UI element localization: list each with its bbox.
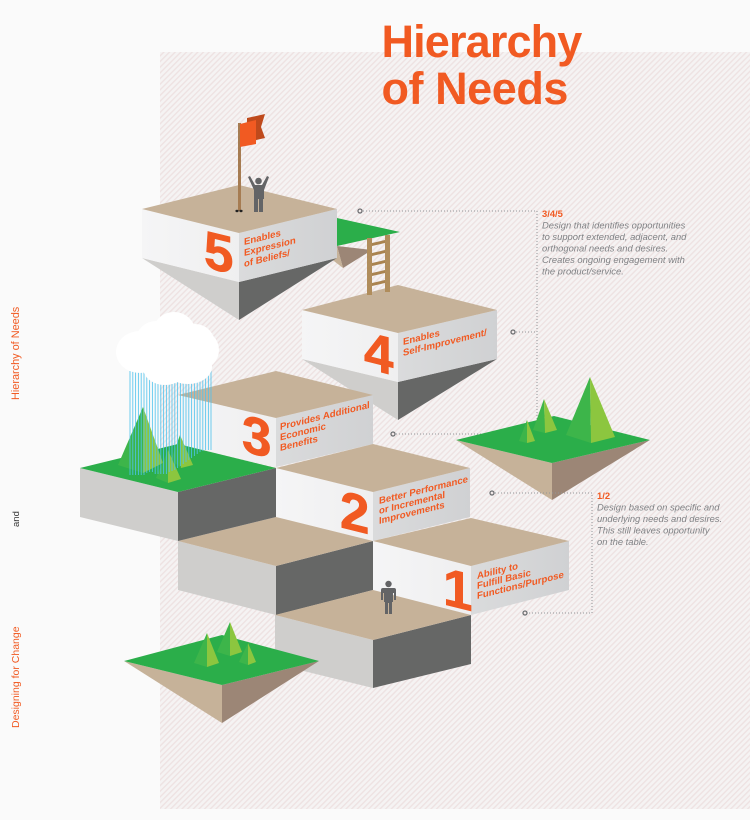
label: Ability to Fulfill Basic Functions/Purpose: Ability to <box>477 561 518 582</box>
label: Better Performance or Incremental Improvements: or Incremental <box>379 490 445 517</box>
text block: 1/2 <box>597 490 722 547</box>
icon: cloud <box>116 312 219 385</box>
title: of Needs <box>382 63 568 114</box>
number 3: 3 <box>242 404 271 470</box>
label: Provides Additional Economic Benefits: Economic <box>280 421 326 443</box>
block 4 <box>302 285 497 420</box>
label: Enables Expression of Beliefs: Enables <box>244 228 281 248</box>
number 5: 5 <box>204 220 233 286</box>
bottom floating island <box>124 622 319 723</box>
label: Better Performance or Incremental Improvements: Better Performance <box>379 474 469 507</box>
number 4: 4 <box>364 321 394 387</box>
green block with trees <box>80 407 276 541</box>
icon: flag <box>235 114 265 212</box>
block 1 <box>373 518 569 623</box>
tree back <box>171 435 193 468</box>
side label: and: and <box>11 511 22 527</box>
text block: 1/2: 1/2 <box>597 490 610 501</box>
tree 1 <box>194 633 219 667</box>
label: Ability to Fulfill Basic Functions/Purpose: Fulfill Basic <box>477 568 531 592</box>
text block: 1/2: Design based on specific and <box>597 502 720 512</box>
small island behind block 5 <box>330 218 400 268</box>
text block: 1/2: This still leaves opportunity <box>597 524 711 536</box>
label: Enables Expression of Beliefs <box>244 224 296 270</box>
label: Ability to Fulfill Basic Functions/Purpose: Functions/Purpose <box>477 570 564 602</box>
block 2 <box>276 444 470 546</box>
text block: 1/2: on the table. <box>597 536 649 547</box>
side label: Hierarchy of Needs: Hierarchy of Needs <box>10 306 22 400</box>
text block: 3/4/5 <box>542 208 687 276</box>
label: Provides Additional Economic Benefits: Benefits <box>280 434 318 454</box>
icon: ladder <box>367 235 390 295</box>
tree big <box>566 377 615 443</box>
right floating island <box>456 377 650 500</box>
callout lines: 1/2 <box>490 491 592 615</box>
title <box>382 16 582 114</box>
label: Ability to Fulfill Basic Functions/Purpose <box>477 550 564 602</box>
label: Enables Expression of Beliefs: Expression <box>244 235 296 259</box>
text block: 1/2: underlying needs and desires. <box>597 513 722 524</box>
number 1: 1 <box>443 557 472 623</box>
label: Better Performance or Incremental Improvements <box>379 474 469 527</box>
side label: Designing for Change: Designing for Change <box>10 626 22 728</box>
step: lowest plain block <box>275 590 471 688</box>
title: Hierarchy <box>382 16 582 67</box>
label: Enables Self-Improvement: Self-Improvement/ <box>403 327 487 359</box>
label: Provides Additional Economic Benefits: Provides Additional <box>280 400 370 433</box>
tree small <box>519 420 535 443</box>
label: Enables Self-Improvement: Enables <box>403 328 440 348</box>
text block: 3/4/5: Design that identifies opportunities <box>542 220 686 230</box>
tree 2 <box>217 622 242 656</box>
tree front <box>156 450 181 483</box>
step: middle plain block <box>178 517 373 615</box>
label: Better Performance or Incremental Improvements: Improvements <box>379 500 445 527</box>
text block: 3/4/5: to support extended, adjacent, and <box>542 231 687 242</box>
label: Enables Expression of Beliefs: of Beliefs/ <box>244 248 290 270</box>
callout lines: 3/4/5 <box>358 209 537 436</box>
text block: 3/4/5: the product/service. <box>542 266 624 276</box>
text block: 3/4/5: orthogonal needs and desires. <box>542 242 668 254</box>
tree medium <box>533 399 557 433</box>
block 5 <box>142 185 337 320</box>
tree 3 <box>239 643 256 665</box>
label: Provides Additional Economic Benefits <box>280 400 370 454</box>
block 3 <box>178 371 373 470</box>
icon: person cheering <box>248 176 269 212</box>
tree large <box>118 407 163 473</box>
panel: striped background <box>160 52 750 809</box>
text block: 3/4/5: Creates ongoing engagement with <box>542 254 685 265</box>
number 2: 2 <box>340 480 369 546</box>
text block: 3/4/5: 3/4/5 <box>542 208 563 219</box>
icon: person standing <box>381 581 396 614</box>
rain <box>130 367 211 475</box>
